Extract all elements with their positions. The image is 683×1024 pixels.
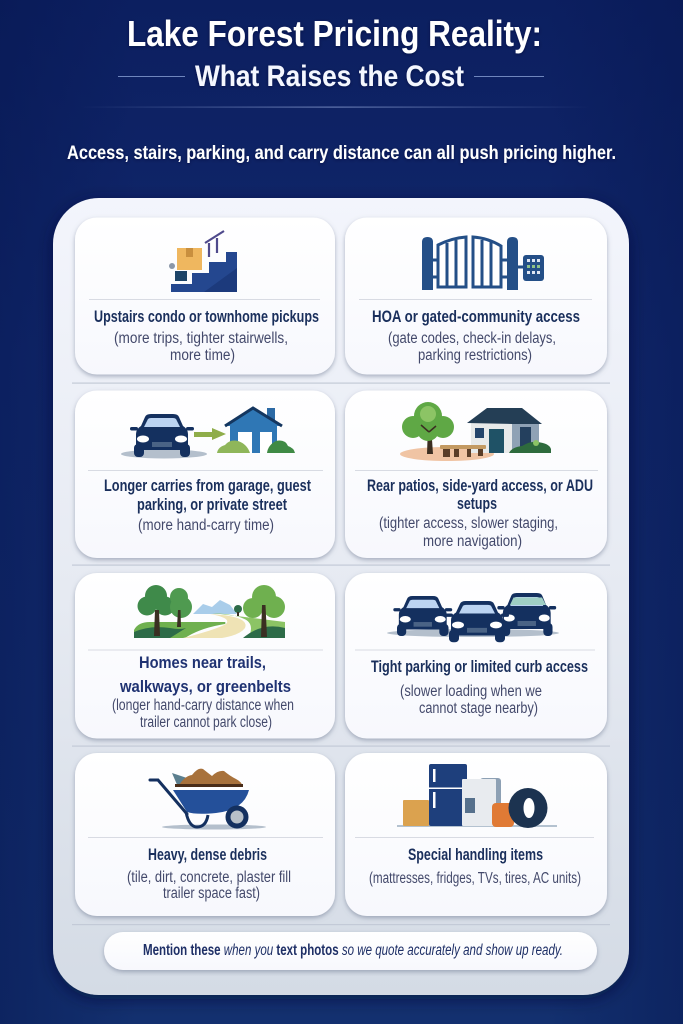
- heading: Tight parking or limited curb access: [371, 658, 588, 676]
- description: (more trips, tighter stairwells,: [114, 330, 288, 347]
- description: cannot stage nearby): [419, 700, 538, 717]
- heading: HOA or gated-community access: [372, 308, 580, 326]
- heading: setups: [457, 495, 497, 513]
- icon: trees and trail: [134, 585, 285, 638]
- header: [67, 13, 616, 164]
- card: HOA or gated access: [345, 218, 607, 374]
- card: trails and greenbelts: [75, 573, 335, 738]
- heading: Special handling items: [408, 846, 543, 864]
- card: heavy debris: [75, 753, 335, 916]
- heading: Homes near trails,: [139, 653, 266, 672]
- description: (tighter access, slower staging,: [379, 515, 558, 532]
- description: (mattresses, fridges, TVs, tires, AC units): [369, 870, 581, 887]
- card: upstairs pickups: [75, 218, 335, 374]
- description: (longer hand-carry distance when: [112, 697, 294, 714]
- heading: walkways, or greenbelts: [119, 677, 291, 696]
- heading: Upstairs condo or townhome pickups: [94, 308, 319, 326]
- description: more time): [170, 347, 235, 364]
- heading: parking, or private street: [137, 496, 287, 514]
- card: longer carries: [75, 390, 335, 558]
- title: Lake Forest Pricing Reality:: [127, 13, 542, 54]
- heading: [119, 653, 291, 696]
- description: [112, 697, 294, 731]
- description: [388, 330, 556, 364]
- description: (more hand-carry time): [138, 517, 274, 534]
- icon: gate and keypad: [422, 237, 544, 290]
- panel: main content: [53, 198, 629, 995]
- callout: [104, 932, 597, 970]
- description: [379, 515, 558, 550]
- card: rear patios: [345, 390, 607, 558]
- description: parking restrictions): [418, 347, 532, 364]
- icon: box, fridge, appliance and tire: [397, 764, 557, 828]
- heading: Longer carries from garage, guest: [104, 477, 311, 495]
- card: tight parking: [345, 573, 607, 738]
- description: trailer space fast): [163, 885, 260, 902]
- card: special handling: [345, 753, 607, 916]
- description: (tile, dirt, concrete, plaster fill: [127, 869, 291, 886]
- heading: Heavy, dense debris: [148, 846, 267, 864]
- subtitle: What Raises the Cost: [195, 60, 464, 93]
- heading: [104, 477, 311, 514]
- description: (slower loading when we: [400, 683, 542, 700]
- icon: three parked cars: [387, 593, 559, 642]
- icon: car, arrow and house: [121, 408, 295, 458]
- icon: wheelbarrow of debris: [150, 769, 266, 830]
- description: [400, 683, 542, 717]
- description: (gate codes, check-in delays,: [388, 330, 556, 347]
- description: trailer cannot park close): [140, 714, 272, 731]
- heading: [367, 477, 593, 513]
- icon: tree, patio and ADU: [400, 402, 551, 461]
- description: more navigation): [423, 533, 522, 550]
- callout: Mention these when you text photos so we quote accurately and show up ready.: [143, 942, 563, 959]
- heading: Rear patios, side-yard access, or ADU: [367, 477, 593, 495]
- description: [127, 869, 291, 902]
- icon: stairs and box: [169, 231, 237, 292]
- description: [114, 330, 288, 364]
